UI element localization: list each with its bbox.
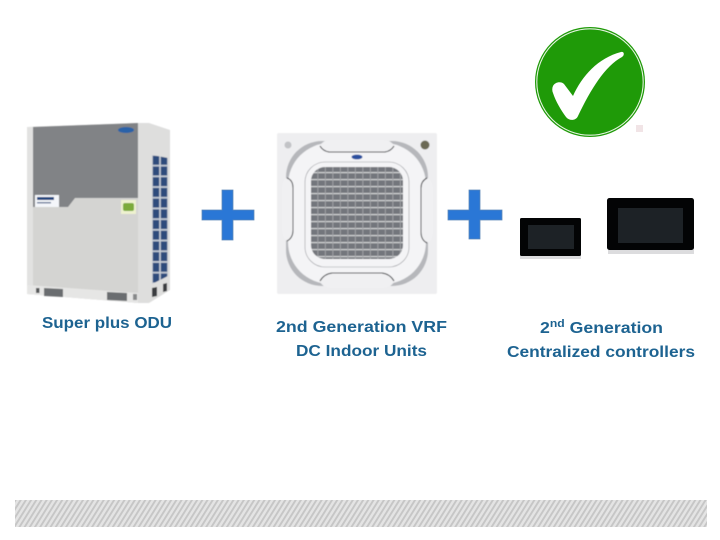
label: controllers xyxy=(507,318,695,361)
label: indoor units xyxy=(276,319,447,360)
cassette logo xyxy=(352,155,362,159)
ODU grey upper panel xyxy=(33,123,138,207)
label: outdoor unit: Super plus ODU xyxy=(42,315,172,332)
cassette panel xyxy=(277,133,437,294)
label: controllers: nd xyxy=(550,318,565,330)
indoor cassette unit xyxy=(277,133,437,294)
small pink marker xyxy=(636,125,643,132)
plus sign 1 xyxy=(202,190,254,240)
label: indoor units: DC Indoor Units xyxy=(296,343,427,360)
ODU fin grille xyxy=(152,155,168,284)
cassette inner outline xyxy=(305,162,409,267)
green check mark icon xyxy=(535,27,645,137)
cassette inner face xyxy=(288,143,426,284)
cassette vane shadow lines xyxy=(287,146,427,281)
cassette air intake grille xyxy=(311,167,403,259)
striped footer bar xyxy=(15,500,707,527)
plus sign 2 xyxy=(448,190,502,239)
ODU green label xyxy=(121,200,136,214)
ODU logo xyxy=(118,127,134,133)
small controller xyxy=(520,218,581,259)
outdoor unit xyxy=(27,123,170,303)
cassette grey corner arcs xyxy=(286,141,428,286)
ODU side panel xyxy=(138,123,170,303)
label: controllers: Generation xyxy=(565,320,663,337)
ODU front panel xyxy=(27,123,138,303)
label: controllers: Centralized controllers xyxy=(507,344,695,361)
ODU base openings xyxy=(27,283,167,303)
ODU badge label xyxy=(35,195,59,207)
label: indoor units: 2nd Generation VRF xyxy=(276,319,447,336)
large controller xyxy=(607,198,694,254)
cassette vanes xyxy=(282,140,433,288)
label: controllers: 2 xyxy=(540,320,549,337)
cassette corner sensors xyxy=(284,142,292,148)
